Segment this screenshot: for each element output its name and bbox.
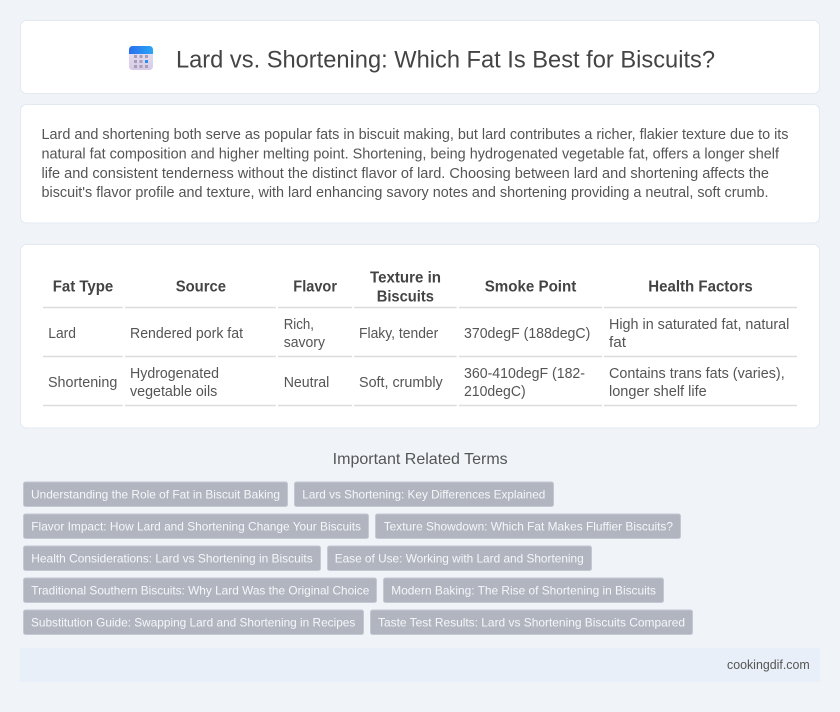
table header row: Texture in [370,270,441,286]
table header row: Fat Type [53,278,113,296]
tag [24,610,364,634]
table header row: Smoke Point [485,278,577,296]
intro paragraph: life and consistent tenderness without the distinct flavor of lard. Choosing between lard and shortening affects the [42,166,769,182]
table row: shortening: 210degC) [464,384,526,400]
tag [24,578,376,602]
panel: introduction [20,104,820,223]
related terms tags [24,482,692,634]
table row: shortening: 360-410degF (182- [464,366,585,382]
tag: Health Considerations: Lard vs Shortening in Biscuits [31,552,313,566]
table row: shortening: Contains trans fats (varies), [609,366,785,382]
icon: calendar [129,46,153,70]
table row: shortening: longer shelf life [609,384,707,400]
intro paragraph: Lard and shortening both serve as popular fats in biscuit making, but lard contributes a richer, flakier texture due to its [42,127,788,143]
table row: lard: savory [284,335,326,351]
table row: lard: Rich, [284,317,314,333]
table row: shortening: Neutral [284,375,329,391]
table row: shortening: Soft, crumbly [359,375,443,391]
intro paragraph: natural fat composition and higher melting point. Shortening, being hydrogenated vegetable fat, offers a longer shelf [42,146,780,162]
table header row: Health Factors [648,278,753,296]
footer source text: cookingdif.com [727,657,810,672]
table row: shortening [48,366,785,400]
table row: lard: Flaky, tender [359,326,438,342]
table row: lard: High in saturated fat, natural [609,317,789,333]
tag [384,578,664,602]
table row: shortening: Shortening [48,375,117,391]
intro paragraph [42,127,788,201]
tag: Taste Test Results: Lard vs Shortening Biscuits Compared [378,616,685,630]
tag: Understanding the Role of Fat in Biscuit Baking [31,488,280,502]
footer [20,648,820,682]
tag: Modern Baking: The Rise of Shortening in Biscuits [391,584,656,598]
tag [24,514,368,538]
tag [328,546,592,570]
tag [24,546,320,570]
tag [370,610,692,634]
title: Lard vs. Shortening: Which Fat Is Best for Biscuits? [176,46,715,74]
tag [294,482,554,506]
table row: shortening: vegetable oils [130,384,217,400]
table header row [53,270,753,306]
heading: important related terms: Important Related Terms [333,451,508,468]
table row: shortening: Hydrogenated [130,366,219,382]
tag: Lard vs Shortening: Key Differences Explained [302,488,545,502]
panel: title header [20,20,820,94]
tag: Ease of Use: Working with Lard and Shortening [335,552,584,566]
tag: Flavor Impact: How Lard and Shortening Change Your Biscuits [31,520,361,534]
table header row: Biscuits [377,288,434,306]
table row: lard: Rendered pork fat [130,326,243,342]
table header row: Source [176,278,226,296]
table row: lard: Lard [48,326,76,342]
intro paragraph: biscuit's flavor profile and texture, with lard enhancing savory notes and shortening providing a neutral, soft crumb. [42,185,768,201]
table row: lard: 370degF (188degC) [464,326,590,342]
tag: Substitution Guide: Swapping Lard and Shortening in Recipes [31,616,355,630]
table header row: Flavor [293,278,337,296]
panel: comparison table [20,244,820,428]
tag [24,482,288,506]
table row: lard: fat [609,335,626,351]
tag [376,514,680,538]
tag: Texture Showdown: Which Fat Makes Fluffier Biscuits? [384,520,673,534]
table row: lard [48,317,789,351]
tag: Traditional Southern Biscuits: Why Lard Was the Original Choice [31,584,370,598]
